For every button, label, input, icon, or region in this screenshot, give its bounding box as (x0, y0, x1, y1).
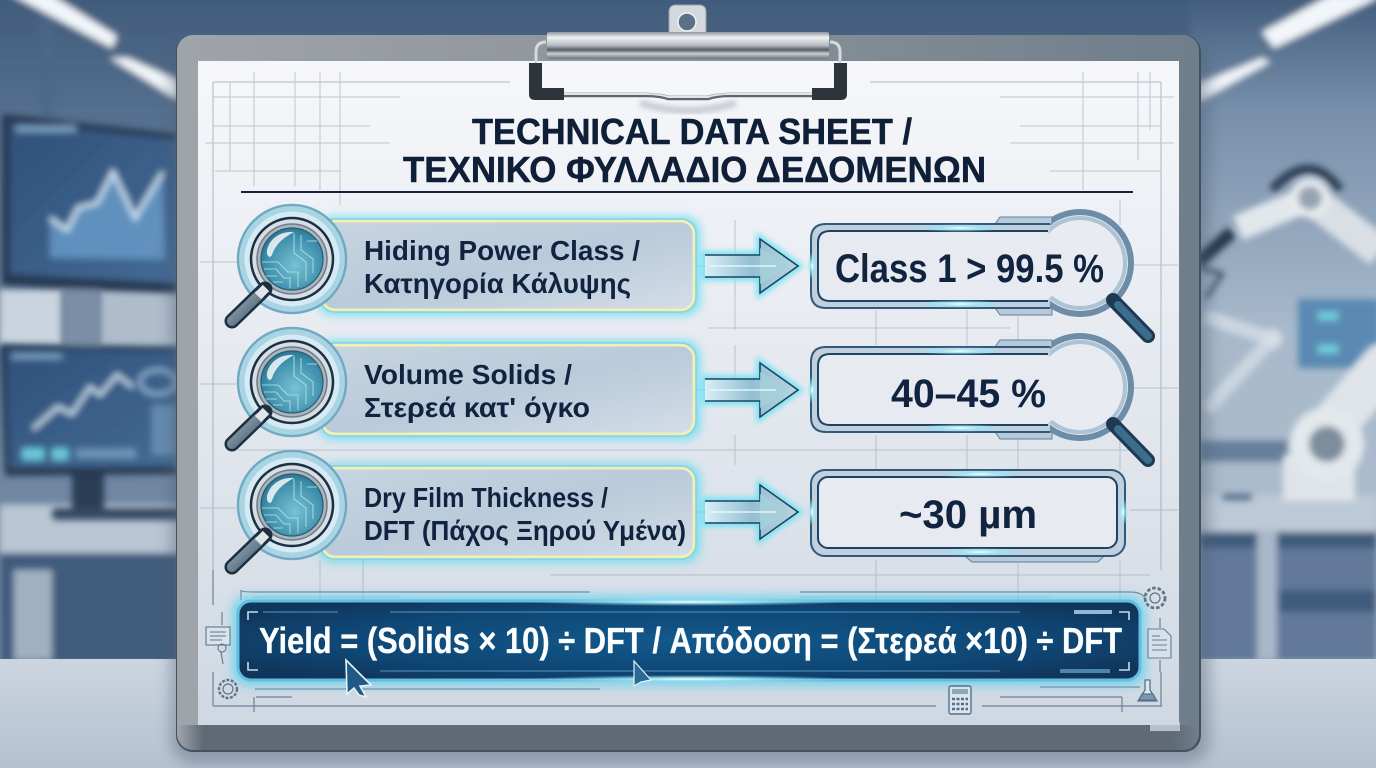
icon: magnifier 2 (232, 328, 346, 444)
formula banner: Yield = (Solids × 10) ÷ DFT / Απόδοση = (Στερεά ×10) ÷ DFT (259, 620, 1122, 661)
background: left monitors with line charts (0, 114, 182, 520)
arrow 1 (705, 239, 798, 293)
icon: gear right (1145, 588, 1165, 608)
icon: magnifier 1 (232, 205, 346, 321)
value box 2 (807, 336, 1148, 460)
icon: flask (1138, 680, 1157, 701)
decorative formula frame lines (213, 570, 1162, 712)
value box 1: Class 1 > 99.5 % (835, 247, 1104, 291)
label panel 1 (318, 217, 700, 315)
title rule (241, 191, 1133, 193)
paper sheet (198, 61, 1180, 731)
value box 3: ~30 µm (899, 493, 1037, 537)
label panel 2: Volume Solids / (364, 359, 572, 390)
clipboard board (170, 35, 1210, 764)
row 1: hiding power class (232, 205, 1148, 336)
icon: gear left (219, 680, 237, 698)
title: ΤΕΧΝΙΚΟ ΦΥΛΛΑΔΙΟ ΔΕΔΟΜΕΝΩΝ (403, 149, 986, 190)
value box 2: 40–45 % (891, 372, 1046, 416)
blueprint grid lines (200, 72, 1178, 600)
row 3: dry film thickness (232, 451, 1128, 567)
row 2: volume solids (232, 328, 1148, 460)
icon: calculator (949, 686, 971, 714)
metal clip (529, 32, 847, 110)
label panel 3 (318, 464, 700, 562)
arrow 3 (705, 485, 798, 539)
hanger tab (669, 5, 706, 33)
icon: data document right (1148, 629, 1171, 658)
icon: cursor left (346, 660, 371, 697)
label panel 3: DFT (Πάχος Ξηρού Υμένα) (364, 515, 686, 546)
label panel 1: Κατηγορία Κάλυψης (364, 268, 631, 299)
icon: magnifier 3 (232, 451, 346, 567)
label panel 1: Hiding Power Class / (364, 235, 640, 266)
title: TECHNICAL DATA SHEET / (472, 111, 912, 152)
label panel 2: Στερεά κατ' όγκο (364, 392, 590, 423)
formula banner (232, 595, 1146, 686)
background: robot arms and blue display (1198, 169, 1376, 501)
title (403, 111, 986, 190)
table surface (0, 659, 1376, 768)
label panel 2 (318, 341, 700, 439)
value box 3 (807, 470, 1128, 562)
value box 1 (807, 212, 1148, 336)
icon: document with tree, left (206, 627, 230, 664)
icon: cursor right (634, 661, 651, 686)
label panel 3: Dry Film Thickness / (364, 482, 608, 513)
arrow 2 (705, 363, 798, 417)
